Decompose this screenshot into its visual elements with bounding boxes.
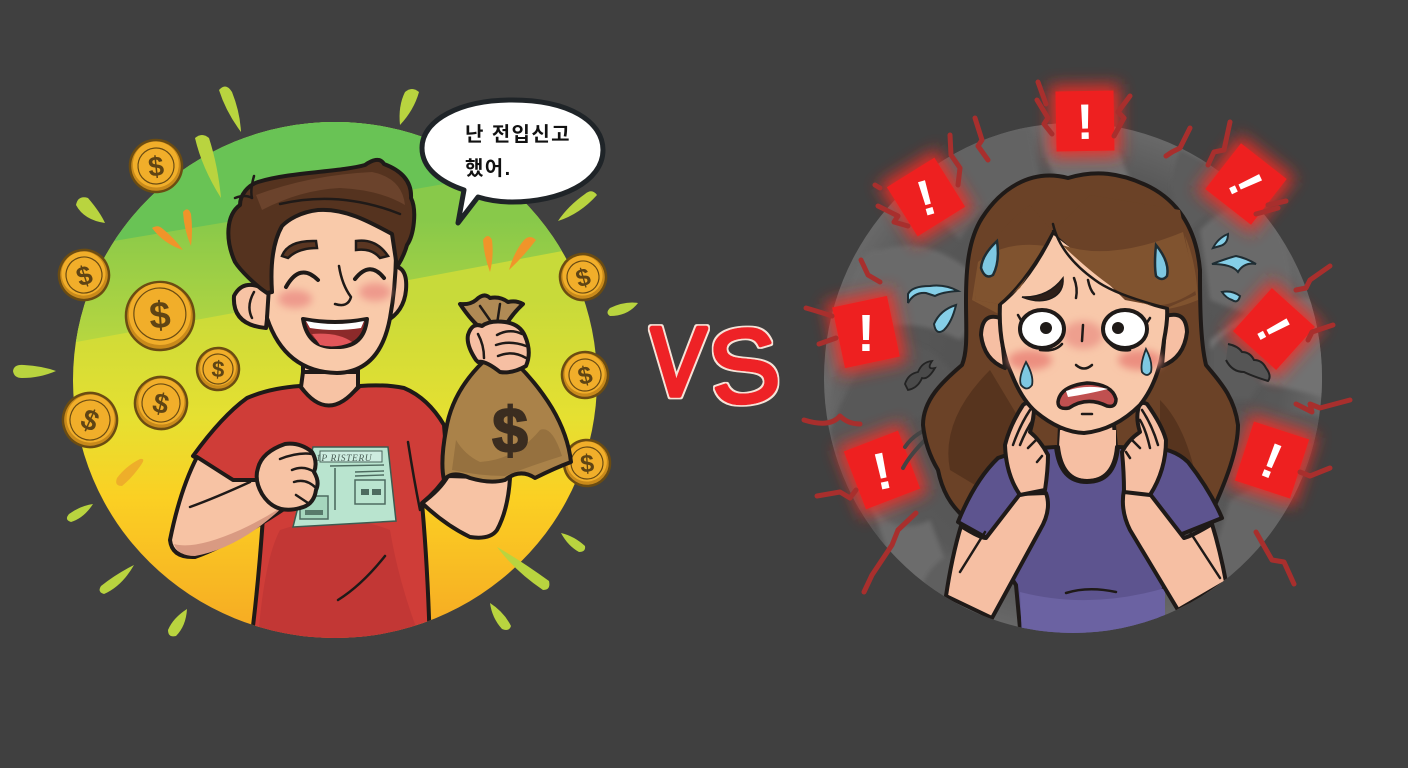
eyebrows xyxy=(282,241,388,258)
blush xyxy=(1008,321,1162,370)
hand on bag xyxy=(468,322,529,372)
coin xyxy=(124,280,196,352)
warning glow and squares xyxy=(825,84,1323,517)
coin: $ xyxy=(73,259,96,293)
coin xyxy=(52,243,116,307)
shirt lower band xyxy=(1020,588,1165,633)
right arm holding bag xyxy=(422,476,510,538)
warning square: ! xyxy=(911,169,942,227)
warning square: ! xyxy=(1076,94,1094,150)
coin: $ xyxy=(147,150,166,183)
blush xyxy=(278,283,391,308)
neck skin xyxy=(1059,430,1116,479)
fist xyxy=(190,444,318,510)
coin xyxy=(127,137,185,195)
shirt fold lines xyxy=(338,442,420,600)
coin xyxy=(129,371,193,435)
left arm xyxy=(170,457,290,557)
face xyxy=(267,208,396,373)
coin: $ xyxy=(76,403,103,439)
warning square: ! xyxy=(1246,310,1300,349)
sweat drops and scribbles xyxy=(903,234,1270,468)
money bag xyxy=(442,295,571,482)
wide eyes xyxy=(1018,310,1150,350)
illustration canvas xyxy=(13,72,1352,638)
warning square xyxy=(1049,84,1121,158)
warning square: ! xyxy=(868,442,897,502)
red lightning marks xyxy=(804,82,1350,592)
gradient circle background xyxy=(60,110,610,640)
arm shadow xyxy=(174,510,279,556)
woman figure xyxy=(923,173,1238,650)
coin: $ xyxy=(579,450,595,478)
letter S: S xyxy=(703,305,786,429)
warning square: ! xyxy=(1217,166,1272,203)
hair bangs xyxy=(975,195,1196,308)
tears xyxy=(981,241,1168,388)
warning square xyxy=(1227,414,1317,506)
shirt shadow xyxy=(259,524,416,638)
speech bubble xyxy=(422,100,603,223)
open mouth xyxy=(303,319,367,347)
gray swirl circle background xyxy=(820,120,1330,640)
right arm and hand xyxy=(1122,403,1226,610)
panel: anxious woman xyxy=(804,82,1350,650)
coin: $ xyxy=(573,263,594,293)
coin: $ xyxy=(211,356,225,382)
panel: happy man with money xyxy=(13,86,638,650)
hair back xyxy=(923,173,1238,518)
warning square: ! xyxy=(1253,432,1290,490)
left arm and hand xyxy=(946,403,1048,618)
hair strands xyxy=(235,176,400,214)
hair xyxy=(228,160,414,293)
registration paper: 1P RISTERU xyxy=(316,454,373,464)
nose xyxy=(335,266,351,305)
purple shirt xyxy=(958,447,1222,650)
warning square xyxy=(825,289,907,375)
bubble text: 했어. xyxy=(465,157,512,180)
dollar sign on bag: $ xyxy=(492,394,528,466)
bubble text: 난 전입신고 xyxy=(465,123,571,146)
letter V: V xyxy=(647,309,708,417)
neck xyxy=(1057,426,1118,446)
hair shade xyxy=(948,370,1193,484)
face xyxy=(1000,232,1167,433)
coin: $ xyxy=(150,387,173,421)
coin: $ xyxy=(148,294,172,338)
hair lighter band xyxy=(972,237,1198,314)
warning square xyxy=(879,149,973,245)
red t-shirt xyxy=(193,385,448,650)
coin xyxy=(562,438,612,488)
coin xyxy=(555,249,611,305)
warning square xyxy=(836,423,928,517)
decorative sparks xyxy=(13,86,638,636)
man figure xyxy=(170,160,571,650)
warning square xyxy=(1197,135,1295,233)
coin xyxy=(54,384,126,456)
coin xyxy=(557,347,613,403)
closed smiling eyes xyxy=(286,269,384,287)
VS label xyxy=(647,305,786,429)
coin xyxy=(196,347,240,391)
registration paper xyxy=(293,447,396,527)
warning square: ! xyxy=(857,305,875,363)
ears xyxy=(981,315,1187,368)
warning square xyxy=(1225,280,1323,378)
eyebrows and forehead lines xyxy=(1022,278,1094,301)
collar skin xyxy=(301,372,358,406)
neck xyxy=(301,366,360,372)
ears xyxy=(234,266,406,328)
coin: $ xyxy=(575,361,595,391)
nose xyxy=(1076,325,1092,368)
hair highlight xyxy=(256,172,405,210)
worried mouth xyxy=(1058,383,1116,414)
